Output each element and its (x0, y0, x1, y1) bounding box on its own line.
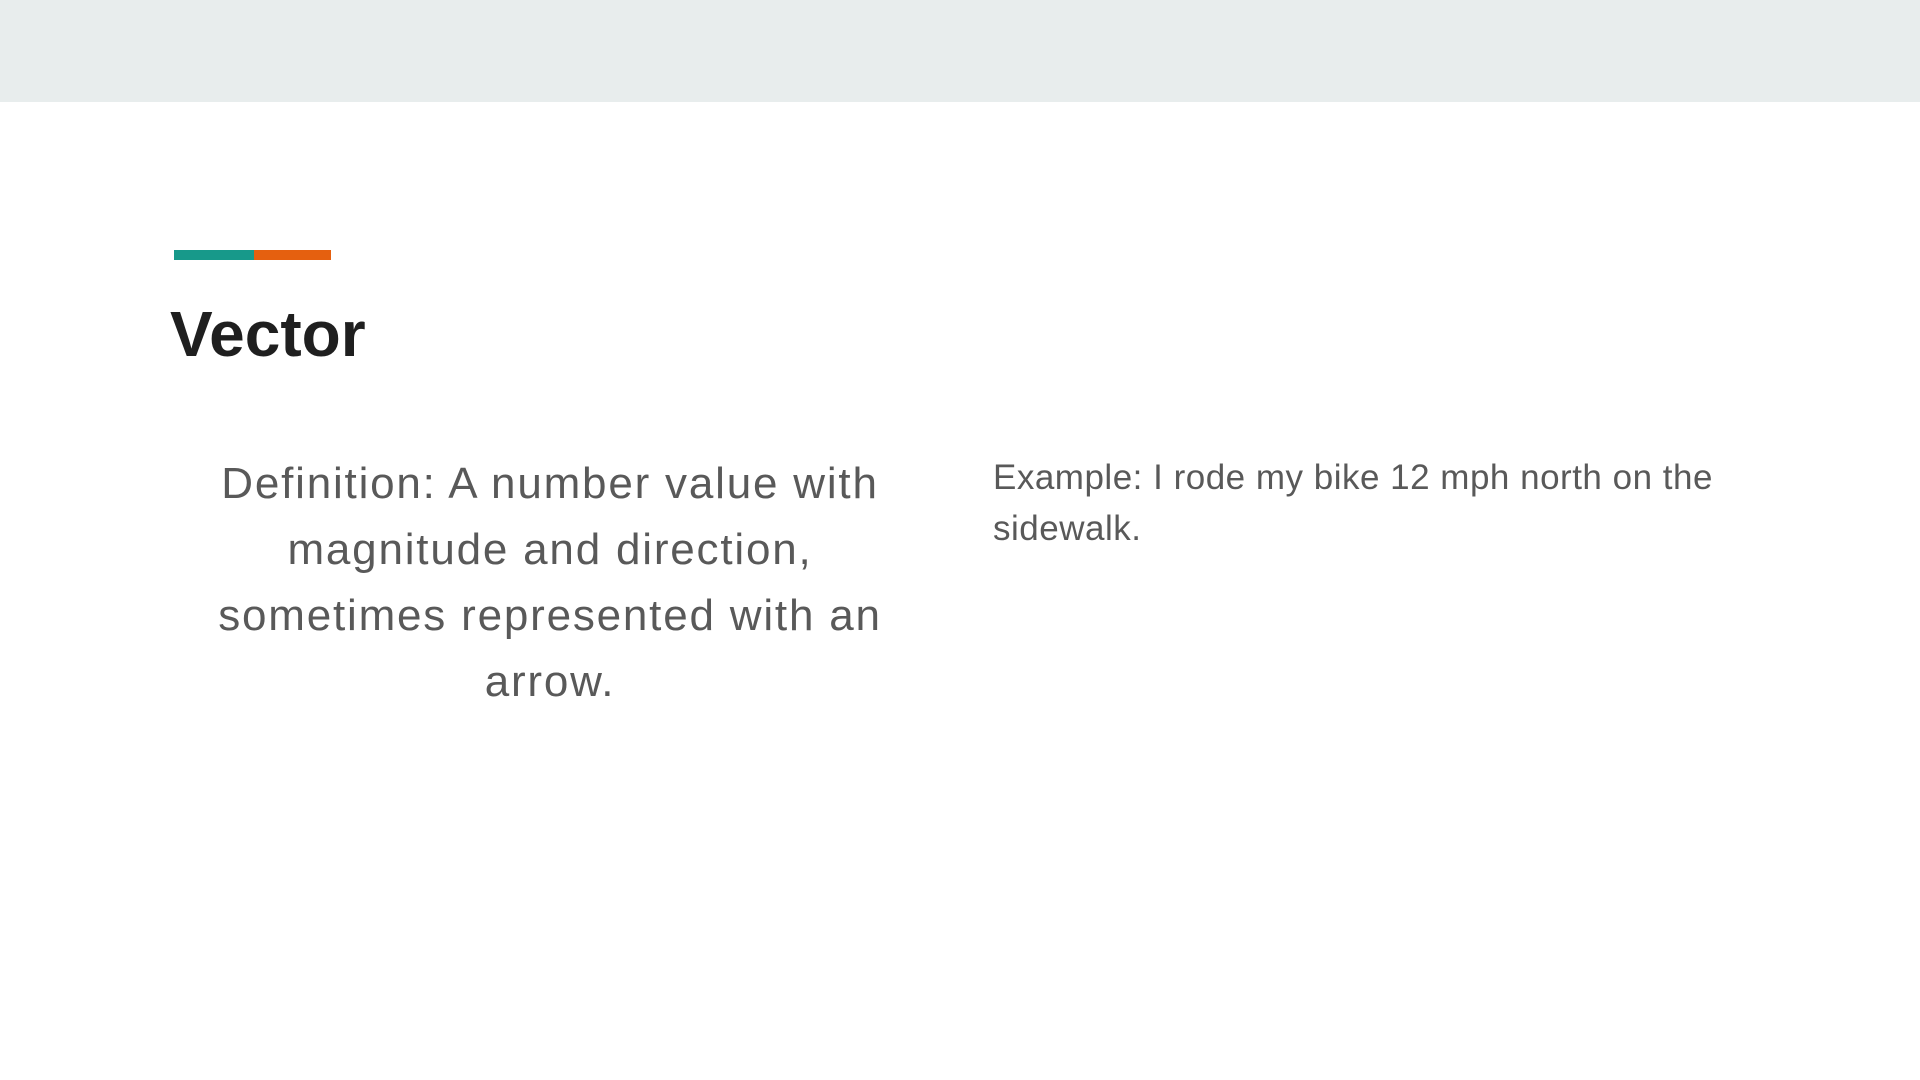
accent bar (174, 250, 331, 260)
definition text: Definition: A number value with magnitude and direction, sometimes represented with an arrow. (218, 459, 882, 706)
example text: Example: I rode my bike 12 mph north on the sidewalk. (993, 458, 1713, 548)
title: Vector (170, 298, 366, 370)
top band (0, 0, 1920, 102)
